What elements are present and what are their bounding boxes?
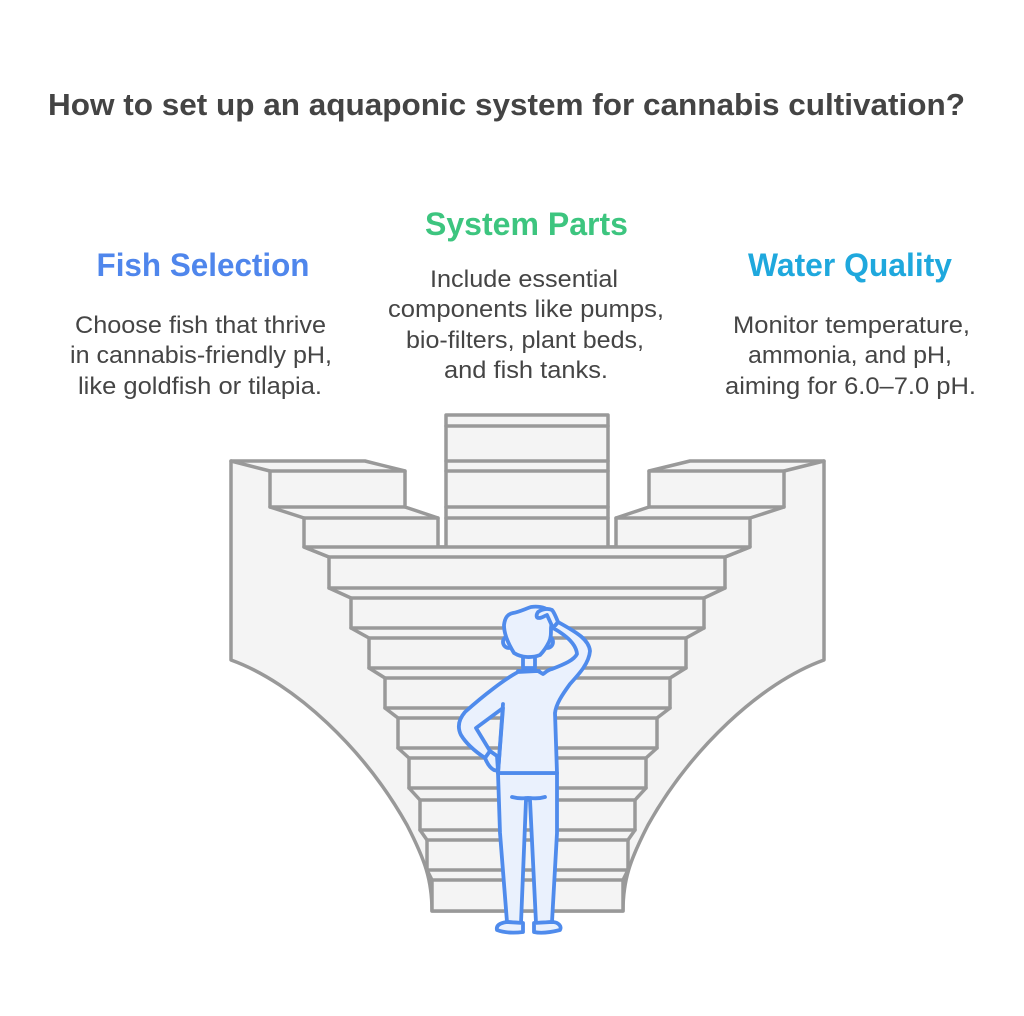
text block: fish selection [70, 247, 332, 400]
text block: system parts [388, 206, 664, 384]
legs [498, 773, 557, 923]
staircase diagram [231, 415, 824, 911]
person scratching head [459, 607, 590, 933]
heading: fish selection: Fish Selection [96, 247, 310, 283]
torso and arms [459, 622, 590, 773]
description: fish selection: Choose fish that thrive [75, 312, 326, 339]
cuff [485, 751, 497, 758]
description: system parts: components like pumps, [388, 296, 664, 323]
description: fish selection: in cannabis-friendly pH, [70, 342, 332, 369]
description: fish selection [70, 312, 332, 400]
hand [537, 609, 558, 628]
description: system parts: Include essential [430, 266, 618, 293]
center tower lines [446, 426, 608, 518]
description: water quality: aiming for 6.0–7.0 pH. [725, 373, 976, 400]
description: water quality: ammonia, and pH, [748, 342, 952, 369]
description: water quality: Monitor temperature, [733, 312, 970, 339]
description: system parts: and fish tanks. [444, 357, 608, 384]
staircase silhouette [231, 415, 824, 911]
main stair flight [304, 547, 750, 911]
description: water quality [725, 312, 976, 400]
title: How to set up an aquaponic system for cannabis cultivation? [48, 87, 965, 122]
description: fish selection: like goldfish or tilapia. [78, 373, 322, 400]
description: system parts [388, 266, 664, 384]
neck [523, 656, 535, 668]
ears [503, 636, 553, 648]
left tier steps [231, 461, 438, 557]
description: system parts: bio-filters, plant beds, [406, 327, 644, 354]
heading: water quality: Water Quality [748, 247, 952, 283]
right tier steps [616, 461, 824, 557]
heading: system parts: System Parts [425, 206, 628, 242]
collar [518, 669, 539, 673]
shoes [497, 922, 561, 933]
torso left edge [498, 704, 503, 773]
text block: water quality [725, 247, 976, 400]
head [504, 607, 551, 657]
